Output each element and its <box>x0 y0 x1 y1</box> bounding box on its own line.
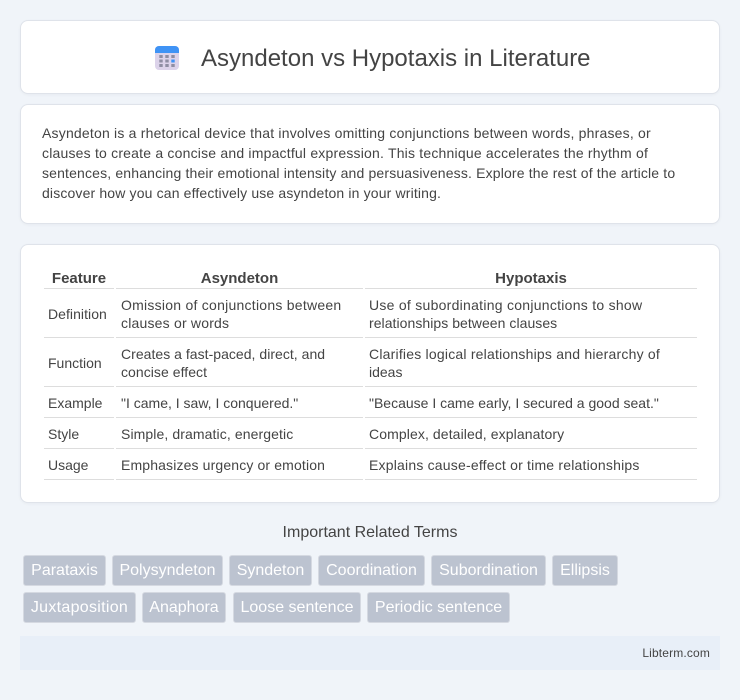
row: Definition: Use of subordinating conjunctions to show <box>369 297 642 313</box>
row: Definition: Definition <box>48 306 107 322</box>
row: Example <box>44 395 697 418</box>
intro text: sentences, enhancing their emotional intensity and persuasiveness. Explore the rest of the article to <box>42 165 675 181</box>
tags: related terms: Parataxis <box>31 562 98 579</box>
row: Style: Style <box>48 426 79 442</box>
tags: related terms: Subordination <box>439 562 538 579</box>
column header: Hypotaxis <box>365 269 697 289</box>
row: Definition: Omission of conjunctions between <box>121 297 341 313</box>
intro text: Asyndeton is a rhetorical device that involves omitting conjunctions between words, phrases, or <box>42 125 651 141</box>
row: Function <box>44 346 697 387</box>
row: Function: Function <box>48 355 102 371</box>
intro text: clauses to create a concise and impactful expression. This technique accelerates the rhythm of <box>42 145 648 161</box>
row: Function: concise effect <box>121 364 207 380</box>
intro text: discover how you can effectively use asyndeton in your writing. <box>42 185 441 201</box>
panel: introduction <box>20 104 720 224</box>
tags: related terms: Ellipsis <box>560 562 610 579</box>
column header: Asyndeton <box>116 269 363 289</box>
row: Usage: Usage <box>48 457 88 473</box>
row: Style: Complex, detailed, explanatory <box>369 426 564 442</box>
row: Style: Simple, dramatic, energetic <box>121 426 293 442</box>
tags: related terms: Syndeton <box>237 562 304 579</box>
column header: Asyndeton: Asyndeton <box>201 270 278 287</box>
tags: related terms: Coordination <box>326 562 417 579</box>
icon: calendar <box>155 46 179 70</box>
row: Example: "I came, I saw, I conquered." <box>121 395 298 411</box>
heading: related terms: Important Related Terms <box>283 524 457 541</box>
row: Usage <box>44 457 697 480</box>
tags: related terms: Loose sentence <box>240 599 353 616</box>
panel: title header <box>20 20 720 94</box>
row: Function: Clarifies logical relationships and hierarchy of <box>369 346 660 362</box>
tags: related terms <box>23 555 618 623</box>
row: Function: ideas <box>369 364 402 380</box>
column header: Feature: Feature <box>52 270 106 287</box>
panel: comparison table <box>20 244 720 503</box>
title: Asyndeton vs Hypotaxis in Literature <box>201 45 591 72</box>
row: Definition: clauses or words <box>121 315 229 331</box>
footer source: Libterm.com <box>642 646 710 660</box>
row: Definition <box>44 297 697 338</box>
row: Usage: Explains cause-effect or time relationships <box>369 457 640 473</box>
row: Style <box>44 426 697 449</box>
row: Example: Example <box>48 395 102 411</box>
tags: related terms: Polysyndeton <box>119 562 216 579</box>
row: Example: "Because I came early, I secured a good seat." <box>369 395 659 411</box>
row: Function: Creates a fast-paced, direct, and <box>121 346 325 362</box>
column header: Hypotaxis: Hypotaxis <box>495 270 567 287</box>
intro text <box>42 125 675 201</box>
column header: Feature <box>44 269 114 289</box>
tags: related terms: Anaphora <box>149 599 219 616</box>
row: Definition: relationships between clauses <box>369 315 557 331</box>
footer bar <box>20 636 720 670</box>
row: Usage: Emphasizes urgency or emotion <box>121 457 325 473</box>
tags: related terms: Juxtaposition <box>31 599 128 616</box>
tags: related terms: Periodic sentence <box>375 599 502 616</box>
